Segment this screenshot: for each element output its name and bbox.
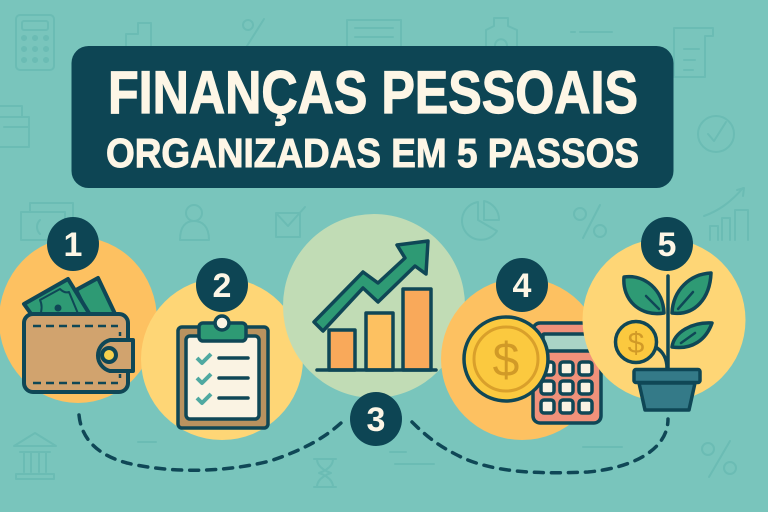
number badge 4: 4 bbox=[513, 267, 532, 305]
title banner bbox=[72, 46, 674, 188]
step 5: plant bbox=[582, 238, 746, 410]
step 1: wallet bbox=[0, 237, 157, 403]
number badge 3: 3 bbox=[367, 401, 385, 439]
number badge 4 bbox=[496, 258, 548, 312]
title line 1: FINANÇAS PESSOAIS bbox=[108, 59, 638, 126]
step 2: clipboard bbox=[141, 278, 303, 440]
icon: gold coin: $ bbox=[493, 334, 519, 387]
icon: wallet with banknotes bbox=[24, 278, 133, 392]
circle background 4 bbox=[441, 278, 603, 440]
icon: plant with coin bbox=[616, 273, 712, 410]
number badge 5 bbox=[641, 217, 693, 271]
circle background 2 bbox=[141, 278, 303, 440]
step 4: coin and calculator bbox=[441, 278, 603, 440]
icon: clipboard checklist bbox=[178, 316, 268, 428]
number badge 1: 1 bbox=[64, 226, 82, 264]
dashed path connecting the steps bbox=[79, 415, 668, 473]
icon: gold coin bbox=[464, 317, 548, 401]
number badge 3 bbox=[350, 392, 402, 446]
number badge 2: 2 bbox=[213, 267, 231, 305]
circle background 5 bbox=[582, 238, 746, 402]
circle background 1 bbox=[0, 237, 157, 403]
icon: calculator bbox=[533, 323, 601, 423]
coin dollar sign: $ bbox=[628, 327, 645, 360]
icon: bar chart with arrow bbox=[314, 241, 436, 370]
number badge 5: 5 bbox=[658, 226, 676, 264]
number badge 2 bbox=[196, 258, 248, 312]
step 3: growth chart bbox=[283, 214, 465, 398]
number badge 1 bbox=[47, 217, 99, 271]
circle background 3 bbox=[283, 214, 465, 398]
title line 2: ORGANIZADAS EM 5 PASSOS bbox=[106, 130, 639, 176]
